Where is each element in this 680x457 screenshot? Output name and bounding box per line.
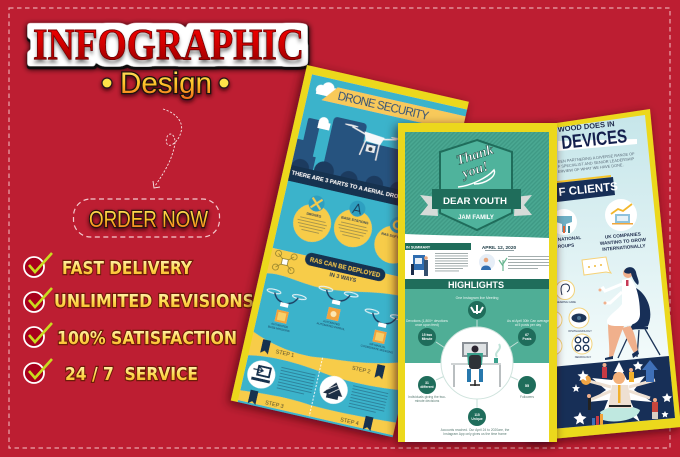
arrow: dashed curve to order button [153, 109, 182, 188]
part: ras software [374, 218, 398, 264]
subtitle text: Design [120, 67, 212, 100]
stat: followers: 55 [525, 384, 529, 388]
small figures [587, 360, 658, 425]
pill: ras can be deployed [304, 252, 386, 282]
step 2: STEP 2 [351, 366, 371, 376]
intro copy [558, 152, 634, 173]
deploy drone 2: AUTOMATED PATROL [316, 321, 346, 331]
label: 100% SATISFACTION [57, 328, 237, 349]
deploy drone 2 [316, 286, 359, 330]
icon: eye [568, 308, 592, 333]
item: satisfaction [24, 323, 237, 349]
label: FAST DELIVERY [62, 258, 193, 279]
icon: molecule [572, 334, 592, 359]
intro copy: ERVIEW OF WHAT WE HAVE DONE. [558, 162, 624, 174]
partial icons [544, 311, 562, 355]
stat: followers: Followers [520, 395, 534, 399]
icon: computer [247, 360, 276, 389]
feature list [24, 253, 254, 385]
stat: different [408, 376, 446, 403]
button outline [74, 199, 220, 237]
step text right [348, 385, 388, 415]
part: drones [292, 196, 332, 242]
deploy drone 3: COORDINATE MISSIONS [360, 343, 393, 355]
ribbon title: DEAR YOUTH [443, 196, 507, 207]
step 4 [340, 416, 374, 432]
bullet dot left [102, 78, 112, 88]
caption: uk companies: UK COMPANIES [605, 231, 641, 240]
order now button [74, 199, 220, 237]
ribbon subtitle: JAM FAMILY [458, 215, 494, 221]
icon: check [24, 253, 52, 277]
step text left [277, 367, 316, 396]
caption: national groups: NATIONAL [558, 235, 582, 242]
central illustration [441, 327, 513, 399]
icon: white drone [344, 123, 398, 161]
panel: medical devices card [530, 109, 680, 441]
icon: ear: HEARING CARE [556, 300, 576, 304]
summary copy [435, 253, 468, 271]
step panel right [312, 371, 403, 425]
icon: growth chart [605, 199, 637, 231]
lettering: thank you: you! [459, 159, 490, 182]
banner strip [557, 175, 611, 183]
step 4: STEP 4 [339, 417, 359, 427]
caption: national groups: ROUPS [558, 243, 574, 249]
deploy drone 1: BASE MISSIONS [268, 324, 290, 333]
stat: different: Individuals giving the two- [408, 395, 446, 399]
caption: uk companies [600, 231, 647, 252]
step 1 [260, 339, 294, 358]
subtitle: Design [102, 67, 229, 100]
icon: check [24, 359, 52, 383]
lettering: thank you: Thank [455, 143, 495, 169]
stat: unique: Instagram App only gives us the time frame [443, 432, 507, 436]
icon: molecule: NEUROLOGY [575, 355, 592, 359]
summary copy right [508, 256, 549, 269]
item: fast delivery [24, 253, 193, 279]
caption: national groups [558, 236, 582, 248]
band text: THERE ARE 3 PARTS TO A AERIAL DRONE [291, 170, 407, 202]
clients banner [557, 177, 615, 202]
stat: minutes: Minute [422, 337, 432, 341]
stat: different: different [420, 385, 434, 389]
step 3 [248, 390, 284, 408]
stat: posts [507, 319, 549, 346]
step 3: STEP 3 [264, 400, 284, 410]
step panel left [240, 352, 320, 406]
item: service [24, 359, 198, 385]
deploy drone 2: AUTOMATED [323, 319, 340, 327]
stat: live meeting [456, 296, 498, 319]
stat: unique [441, 408, 510, 436]
in summary bar [405, 243, 471, 250]
icon: eye: OPHTHALMOLOGY [568, 329, 592, 333]
stat: live meeting: One Instagram live Meeting [456, 296, 498, 300]
steps section [238, 332, 398, 436]
stat: unique: 115 [474, 413, 480, 417]
connector lines [436, 320, 518, 408]
icon: check [24, 288, 52, 312]
heading: devices: DEVICES [560, 126, 628, 154]
deploy drone 1: AUTOMATED [271, 322, 289, 329]
panel: drone security card [231, 65, 469, 438]
highlights section background [405, 288, 549, 363]
icon: check [24, 323, 52, 347]
part: base stations [334, 200, 372, 248]
deploy drone 3 [360, 308, 398, 354]
ribbon tails [420, 195, 532, 216]
illustration: meditating figure [581, 362, 655, 422]
lettering: thank you [455, 143, 495, 187]
stat: minutes: once upon feed) [415, 323, 439, 327]
yellow deploy section [266, 248, 398, 296]
step 2 [352, 364, 386, 380]
city skyline [292, 116, 398, 190]
icon: speech bubble [582, 257, 611, 275]
stat: minutes: Devotions (1,800+ devotions [406, 319, 448, 323]
ribbon [432, 189, 521, 209]
button label: ORDER NOW [89, 206, 208, 232]
intro copy: EEN PARTNERING A DIVERSE RANGE OF [558, 151, 635, 164]
panel: dear youth card [398, 123, 557, 442]
icon: roof [319, 376, 348, 404]
stat: followers [518, 376, 536, 399]
stat: posts: Posts [523, 337, 532, 341]
pill: ras can be deployed: IN 3 WAYS [329, 272, 357, 284]
icon: ear [556, 280, 576, 304]
caption: uk companies: INTERNATIONALLY [602, 243, 647, 252]
deploy drone 1 [266, 288, 307, 332]
step 1: STEP 1 [275, 349, 295, 359]
label: UNLIMITED REVISIONS [54, 291, 254, 312]
illustration: woman and plant [479, 254, 507, 271]
header background [405, 132, 549, 238]
part: ras software: RAS SOFTWARE [381, 232, 410, 242]
heading small: WOOD DOES IN [557, 119, 615, 134]
pill: ras can be deployed: RAS CAN BE DEPLOYED [309, 258, 381, 279]
banner text: F CLIENTS [558, 181, 619, 199]
illustration: people at board [411, 255, 428, 276]
heading: drone security: DRONE SECURITY [336, 91, 430, 123]
icon: corner drones [272, 250, 298, 274]
highlights heading: HIGHLIGHTS [448, 280, 504, 290]
icon: national groups [557, 209, 577, 235]
stat: unique: Accounts reached. Our April 24 to 2020are, the [441, 428, 510, 432]
stat: minutes: 15 two [422, 333, 432, 337]
title ribbon [322, 87, 466, 123]
cloud [316, 82, 336, 96]
illustration: seated doctor [598, 267, 660, 360]
intro copy: F SPECIALIST AND SENIOR LEADERSHIP [558, 156, 635, 169]
deploy drone 3: OR MANUAL [369, 342, 387, 350]
date: APRIL 12, 2020 [482, 245, 516, 251]
stat: unique: Unique [471, 417, 483, 421]
page fold [309, 358, 323, 416]
badge: shield [440, 140, 512, 230]
stat: posts: at 5 posts per day [515, 323, 541, 327]
part: base stations: BASE STATIONS [341, 215, 369, 226]
stat: different: minute decisions [415, 399, 440, 403]
band [288, 165, 398, 206]
bullet dot right [219, 78, 229, 88]
stat: posts: As at April 30th Can average [507, 319, 549, 323]
part: drones: DRONES [306, 212, 322, 219]
navy band [540, 355, 680, 430]
heading highlight [558, 139, 637, 151]
caption: uk companies: WANTING TO GROW [600, 237, 647, 246]
title: INFOGRAPHIC: INFOGRAPHIC [33, 20, 304, 69]
in summary bar: IN SUMMARY [406, 246, 431, 250]
stat: minutes [406, 319, 448, 346]
stat: different: 31 [425, 381, 429, 385]
stat: posts: 67 [525, 333, 529, 337]
label: 24 / 7 SERVICE [65, 364, 198, 385]
highlights heading [405, 279, 549, 290]
stars [572, 361, 672, 424]
item: unlimited revisions [24, 288, 254, 312]
